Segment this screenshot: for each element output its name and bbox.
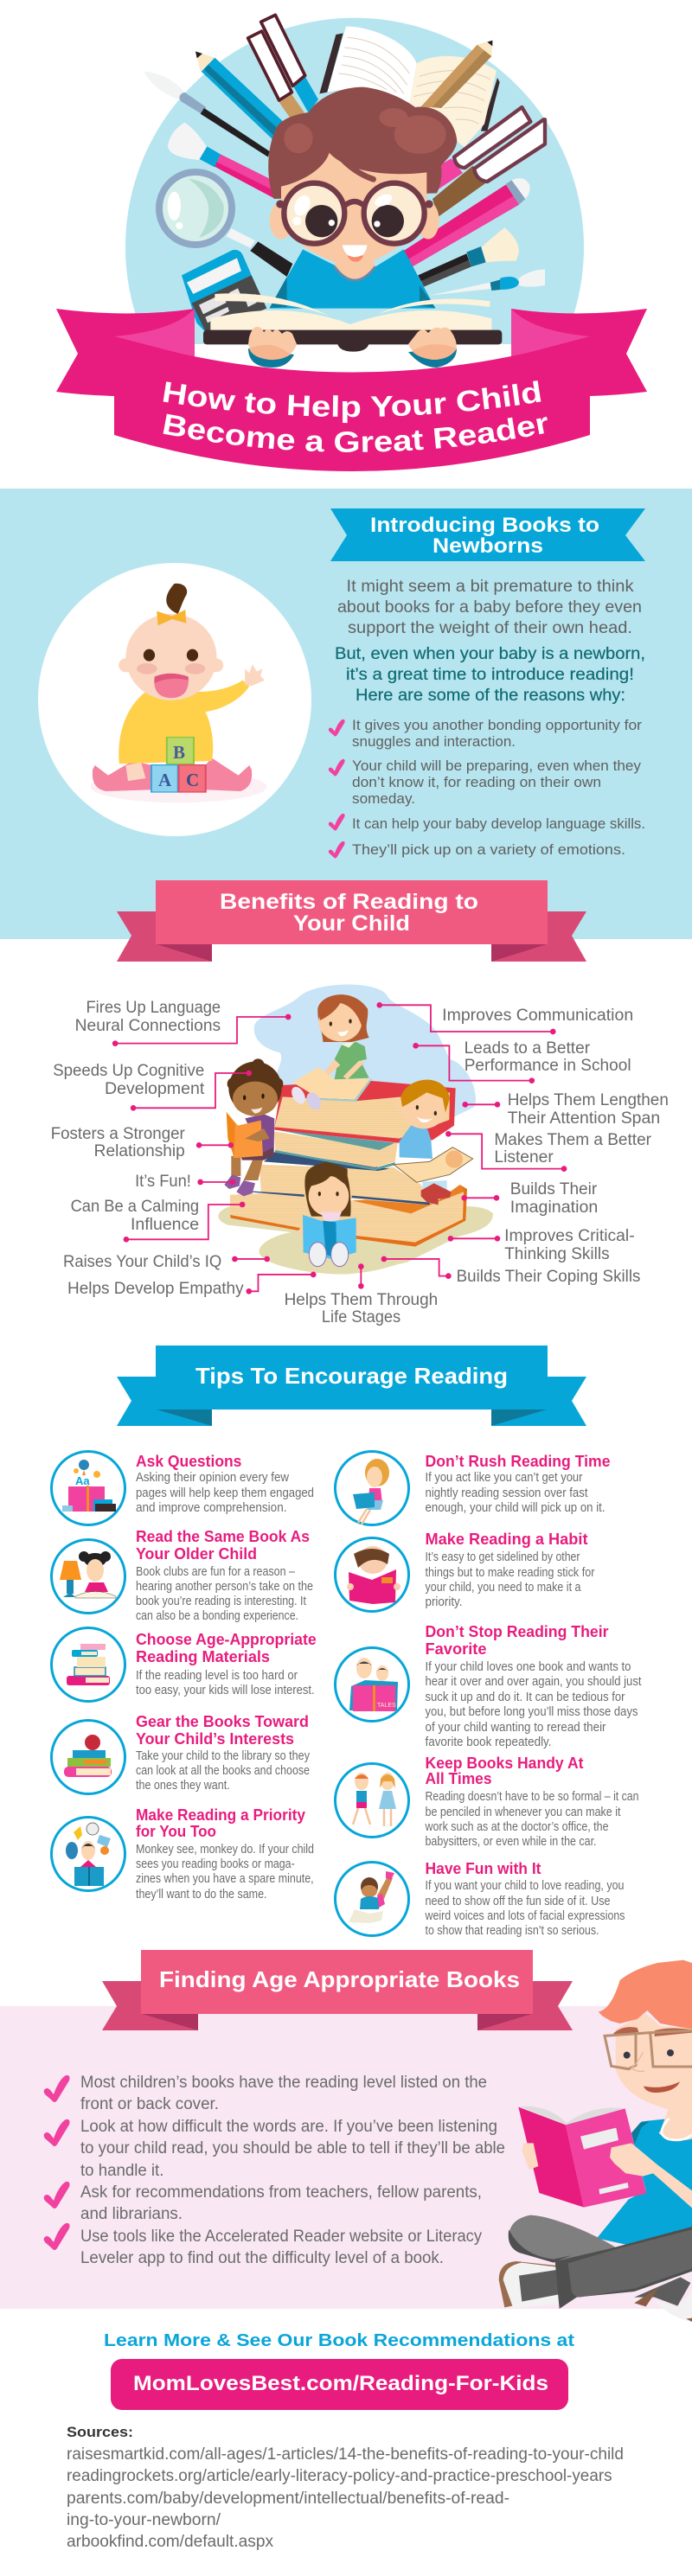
tip text: can look at all the books and choose xyxy=(136,1763,310,1778)
sources xyxy=(67,2424,624,2551)
tip text: babysitters, or even while in the car. xyxy=(426,1834,597,1849)
finding list text: Leveler app to find out the difficulty level of a book. xyxy=(80,2249,444,2267)
ribbon folds xyxy=(114,309,590,357)
title ribbon xyxy=(56,309,647,471)
book stack xyxy=(230,1081,467,1247)
icon: two kids walking xyxy=(336,1764,408,1837)
link button xyxy=(111,2359,568,2410)
title ribbon: Become a Great Reader xyxy=(163,413,548,452)
heading ribbon: Newborns xyxy=(432,534,543,558)
benefit labels: Leads to a Better xyxy=(465,1039,591,1058)
benefit labels: Neural Connections xyxy=(75,1017,221,1035)
icon: right books xyxy=(432,107,545,217)
tip: don't rush xyxy=(336,1451,611,1525)
benefit labels: Helps Them Lengthen xyxy=(508,1091,669,1109)
tip text: Take your child to the library so they xyxy=(136,1748,310,1763)
tip text: Book clubs are fun for a reason – xyxy=(136,1564,296,1579)
list text: snuggles and interaction. xyxy=(352,734,516,750)
benefit labels: Helps Them Through xyxy=(285,1291,438,1309)
icon: back open book xyxy=(319,27,500,147)
title text: How to Help Your Child xyxy=(163,380,541,424)
benefit labels: Life Stages xyxy=(322,1308,400,1326)
benefit labels: Makes Them a Better xyxy=(494,1131,652,1149)
icon: child lying on a book xyxy=(336,1863,408,1935)
sources: readingrockets.org/article/early-literacy-policy-and-practice-preschool-years xyxy=(67,2467,612,2485)
tip text: If your child loves one book and wants to xyxy=(426,1659,631,1674)
panel: header xyxy=(56,13,647,471)
icon: apple on books xyxy=(52,1721,125,1793)
white circle xyxy=(38,563,311,836)
icon: parent reading with floating ideas xyxy=(52,1818,125,1890)
tip text xyxy=(136,1668,315,1697)
teal highlight paragraph xyxy=(335,645,645,705)
back foot and shoe xyxy=(499,2261,560,2308)
icon: parent and child with book xyxy=(336,1648,408,1721)
connector lines xyxy=(112,1002,567,1294)
tip: have fun with it xyxy=(336,1860,625,1938)
tip heading: for You Too xyxy=(136,1823,216,1840)
benefit labels: Thinking Skills xyxy=(504,1245,610,1263)
intro paragraph: support the weight of their own head. xyxy=(348,619,632,637)
hands xyxy=(522,2143,692,2208)
list text: It gives you another bonding opportunity for xyxy=(352,718,643,733)
tip text: they’ll want to do the same. xyxy=(136,1887,266,1902)
tip heading xyxy=(136,1713,309,1748)
tip heading: Reading Materials xyxy=(136,1648,270,1665)
red book xyxy=(274,1081,456,1143)
benefits ribbon xyxy=(117,880,586,962)
boy in blue xyxy=(394,1080,473,1205)
tip text: hearing another person’s take on the xyxy=(136,1579,313,1594)
baby illustration: A xyxy=(158,770,172,790)
teal highlight paragraph: it’s a great time to introduce reading! xyxy=(346,666,634,684)
tip: gear the books xyxy=(52,1713,310,1793)
boy character xyxy=(268,87,457,309)
tip text: hear it over and over again, you should just xyxy=(426,1674,642,1689)
finding list text xyxy=(80,2074,505,2267)
tip text: Monkey see, monkey do. If your child xyxy=(136,1842,314,1857)
neck and collar xyxy=(335,257,375,279)
tip text: can also be a bonding experience. xyxy=(136,1608,298,1623)
tip text xyxy=(136,1564,313,1623)
tip text: book you’re reading is interesting. It xyxy=(136,1594,307,1608)
tip text: zines when you have a spare minute, xyxy=(136,1871,314,1886)
tip heading: Your Child’s Interests xyxy=(136,1730,294,1748)
tip text: of your child wanting to reread their xyxy=(426,1720,606,1735)
benefit labels: Speeds Up Cognitive xyxy=(53,1062,204,1080)
benefit labels: Fires Up Language xyxy=(86,999,221,1017)
tip heading: Gear the Books Toward xyxy=(136,1713,309,1730)
benefit labels xyxy=(51,999,669,1326)
header illustration: boy reading surrounded by books and supplies xyxy=(144,15,545,335)
tip: age appropriate materials xyxy=(52,1627,317,1702)
lower right foot xyxy=(634,2277,692,2322)
tip text: If the reading level is too hard or xyxy=(136,1668,298,1683)
benefit labels: Can Be a Calming xyxy=(71,1198,199,1216)
tip text xyxy=(136,1470,314,1515)
tip text xyxy=(426,1470,606,1515)
icon: cream brush xyxy=(418,227,519,287)
icon: stacked book spines xyxy=(248,15,318,122)
eyes xyxy=(624,2049,674,2059)
tips ribbon xyxy=(117,1346,586,1426)
tip text: Asking their opinion every few xyxy=(136,1470,289,1485)
teal highlight paragraph: But, even when your baby is a newborn, xyxy=(335,645,645,663)
icon: parent and child with book: TALES xyxy=(377,1703,396,1709)
girl in green xyxy=(289,994,372,1112)
boy reading illustration xyxy=(499,1960,692,2322)
tip text: suck it up and do it. It can be tedious for xyxy=(426,1690,625,1704)
tip heading xyxy=(426,1755,583,1787)
tip: don't stop reading favorite xyxy=(336,1623,642,1749)
list text: don’t know it, for reading on their own xyxy=(352,775,601,790)
face xyxy=(616,2013,692,2110)
hair strand xyxy=(340,157,374,179)
benefit labels: Their Attention Span xyxy=(508,1109,660,1128)
icon: blue pencil xyxy=(195,51,283,141)
tip text: It’s easy to get sidelined by other xyxy=(426,1550,580,1564)
tip text: your child, you need to make it a xyxy=(426,1580,581,1595)
icon: white feather brush xyxy=(144,72,270,157)
baby illustration: C xyxy=(186,770,199,790)
mouth xyxy=(348,255,363,262)
icon: tan pencil xyxy=(421,41,492,108)
panel: introducing books to newborns xyxy=(0,489,692,939)
tip heading xyxy=(136,1631,317,1665)
tips ribbon: Tips To Encourage Reading xyxy=(195,1363,508,1389)
icon: girl reading floating xyxy=(336,1451,408,1525)
tip heading: Make Reading a Priority xyxy=(136,1806,305,1824)
tip: reading priority xyxy=(52,1806,314,1902)
tip heading: Make Reading a Habit xyxy=(426,1531,588,1548)
icon: calculator xyxy=(182,250,266,335)
tip heading: Don’t Rush Reading Time xyxy=(426,1453,611,1470)
benefit labels: It’s Fun! xyxy=(135,1173,191,1191)
hair xyxy=(599,1960,692,2029)
benefit labels: Imagination xyxy=(510,1199,598,1217)
shirt xyxy=(270,249,435,309)
panel background xyxy=(0,489,692,939)
teal book xyxy=(274,1131,398,1167)
benefit labels: Helps Develop Empathy xyxy=(67,1280,244,1298)
ears xyxy=(270,201,292,240)
finding list text: Most children’s books have the reading level listed on the xyxy=(80,2074,487,2092)
face xyxy=(281,153,426,266)
tip text: enough, your child will pick up on it. xyxy=(426,1500,606,1515)
tip text: you, but before long you’ll miss those days xyxy=(426,1704,638,1719)
tip text xyxy=(426,1550,595,1609)
tip text: too easy, your kids will lose interest. xyxy=(136,1683,315,1697)
panel: benefits of reading xyxy=(51,880,669,1326)
tip text: If you act like you can’t get your xyxy=(426,1470,583,1485)
tip text xyxy=(136,1748,310,1793)
intro paragraph: It might seem a bit premature to think xyxy=(346,578,634,596)
eyebrows xyxy=(613,2027,692,2036)
finding list text: to handle it. xyxy=(80,2162,163,2180)
cloud xyxy=(254,984,476,1117)
heading ribbon: Introducing Books to xyxy=(370,514,599,537)
tip heading: Favorite xyxy=(426,1640,486,1658)
benefits ribbon: Benefits of Reading to xyxy=(220,890,478,914)
sources: arbookfind.com/default.aspx xyxy=(67,2533,274,2551)
benefit labels: Raises Your Child’s IQ xyxy=(63,1253,221,1271)
tip text xyxy=(136,1842,314,1902)
nose xyxy=(631,2052,644,2071)
sources: raisesmartkid.com/all-ages/1-articles/14-the-benefits-of-reading-to-your-child xyxy=(67,2445,624,2464)
reasons list xyxy=(329,718,645,859)
shirt xyxy=(597,2119,692,2248)
ribbon tails xyxy=(56,309,195,396)
tip text: and improve comprehension. xyxy=(136,1500,287,1515)
icon: magnifying glass xyxy=(159,172,292,277)
tip heading: All Times xyxy=(426,1770,491,1787)
icon: pink pencil xyxy=(404,178,530,266)
tip heading: Don’t Stop Reading Their xyxy=(426,1623,609,1640)
tip: keep books handy xyxy=(336,1755,638,1849)
tip text: need to show off the fun side of it. Use xyxy=(426,1894,611,1908)
finding list text: front or back cover. xyxy=(80,2095,219,2113)
finding list text: to your child read, you should be able to tell if they’ll be able xyxy=(80,2139,505,2157)
header background circle xyxy=(125,18,584,344)
girl with blue book xyxy=(298,1161,360,1267)
tip text: be penciled in whenever you can make it xyxy=(426,1805,621,1819)
benefit labels: Performance in School xyxy=(465,1057,631,1075)
benefits ribbon: Your Child xyxy=(293,911,410,936)
finding ribbon: Finding Age Appropriate Books xyxy=(159,1966,520,1992)
icon: book and ideas xyxy=(52,1451,125,1525)
ground xyxy=(218,1206,493,1275)
crossed legs xyxy=(509,2215,692,2309)
panel: tips to encourage reading xyxy=(52,1346,642,1938)
finding list text: and librarians. xyxy=(80,2205,183,2223)
icon: book and ideas: Aa xyxy=(75,1474,90,1487)
bottom orange book xyxy=(230,1191,465,1243)
tip text: favorite book repeatedly. xyxy=(426,1735,552,1749)
tip text: pages will help keep them engaged xyxy=(136,1486,314,1500)
tip: ask questions xyxy=(52,1451,314,1525)
icon: hands xyxy=(248,327,457,368)
tip text xyxy=(426,1659,642,1749)
tip heading xyxy=(136,1528,310,1563)
hair xyxy=(268,87,457,199)
tip heading: Choose Age-Appropriate xyxy=(136,1631,317,1648)
ribbon main band xyxy=(114,336,590,471)
icon: check marks xyxy=(329,719,345,859)
glasses xyxy=(605,2030,692,2069)
icon: blue-tipped brush xyxy=(430,270,545,296)
tip heading xyxy=(426,1623,609,1658)
tip text xyxy=(425,1878,625,1938)
curly haired child xyxy=(224,1058,283,1196)
finding list text: Look at how difficult the words are. If you’ve been listening xyxy=(80,2118,497,2136)
benefit labels: Builds Their Coping Skills xyxy=(457,1268,640,1286)
tip heading: Keep Books Handy At xyxy=(426,1755,583,1772)
list text xyxy=(352,718,645,858)
hair highlights xyxy=(284,124,313,153)
benefit labels: Relationship xyxy=(94,1142,185,1160)
icon: boy with pink book xyxy=(336,1537,408,1612)
icon: open book held by boy xyxy=(203,293,502,352)
icon: stack of books xyxy=(52,1627,125,1702)
sources: Sources: xyxy=(67,2424,133,2440)
tip text: things but to make reading stick for xyxy=(426,1565,595,1580)
tip text: to show that reading isn’t so serious. xyxy=(426,1923,599,1938)
finding list text: Use tools like the Accelerated Reader website or Literacy xyxy=(80,2228,482,2246)
list text: someday. xyxy=(352,791,415,807)
benefit labels: Builds Their xyxy=(510,1180,598,1199)
tip: same book xyxy=(52,1528,313,1623)
benefit labels: Development xyxy=(105,1080,205,1098)
tip text: If you want your child to love reading, you xyxy=(426,1878,625,1893)
navy book xyxy=(260,1165,430,1205)
link button: MomLovesBest.com/Reading-For-Kids xyxy=(133,2372,548,2395)
icon: big check marks xyxy=(44,2075,69,2250)
tip text: work such as at the doctor’s office, the xyxy=(425,1819,609,1834)
benefit labels: Influence xyxy=(131,1216,199,1234)
tip heading: Your Older Child xyxy=(136,1545,257,1563)
tip heading: Have Fun with It xyxy=(426,1860,541,1877)
sources: ing-to-your-newborn/ xyxy=(67,2511,221,2529)
benefit labels: Fosters a Stronger xyxy=(51,1125,185,1143)
teal highlight paragraph: Here are some of the reasons why: xyxy=(356,687,625,705)
tip text: nightly reading session over fast xyxy=(426,1486,588,1500)
tip text: priority. xyxy=(426,1595,462,1609)
icon: girl reading by lamp xyxy=(52,1539,125,1614)
benefit labels: Improves Critical- xyxy=(504,1227,635,1245)
neck xyxy=(660,2106,692,2140)
panel: finding age appropriate books xyxy=(0,1950,692,2322)
panel: footer xyxy=(67,2330,624,2551)
tip text: sees you reading books or maga- xyxy=(136,1857,295,1871)
benefit labels: Listener xyxy=(494,1148,554,1167)
tip heading: Read the Same Book As xyxy=(136,1528,310,1545)
tip text xyxy=(425,1789,638,1849)
benefit labels: Improves Communication xyxy=(442,1007,633,1025)
children reading on book stack illustration xyxy=(218,984,493,1275)
glasses xyxy=(276,183,433,244)
list text: It can help your baby develop language skills. xyxy=(352,816,645,832)
list text: Your child will be preparing, even when they xyxy=(352,758,642,774)
heading ribbon xyxy=(330,508,645,561)
list text: They’ll pick up on a variety of emotions. xyxy=(352,842,625,858)
tip: make it a habit xyxy=(336,1531,595,1612)
baby illustration xyxy=(91,584,267,802)
icon: pink paint brush xyxy=(168,123,275,199)
sources: parents.com/baby/development/intellectual/benefits-of-read- xyxy=(67,2490,509,2508)
tip heading xyxy=(136,1806,305,1840)
tip heading: Ask Questions xyxy=(136,1453,241,1470)
baby illustration: B xyxy=(173,742,185,763)
intro paragraph xyxy=(337,578,642,637)
call to action heading: Learn More & See Our Book Recommendations at xyxy=(104,2330,574,2350)
tip text: weird voices and lots of facial expressions xyxy=(425,1908,625,1923)
panel background xyxy=(0,2006,692,2309)
tip text: Reading doesn’t have to be so formal – it can xyxy=(426,1789,638,1804)
mouth xyxy=(644,2081,680,2093)
reading book xyxy=(518,2106,646,2208)
finding ribbon xyxy=(102,1950,573,2030)
tip text: the ones they want. xyxy=(136,1778,230,1793)
intro paragraph: about books for a baby before they even xyxy=(337,598,642,617)
finding list text: Ask for recommendations from teachers, fellow parents, xyxy=(80,2183,482,2202)
